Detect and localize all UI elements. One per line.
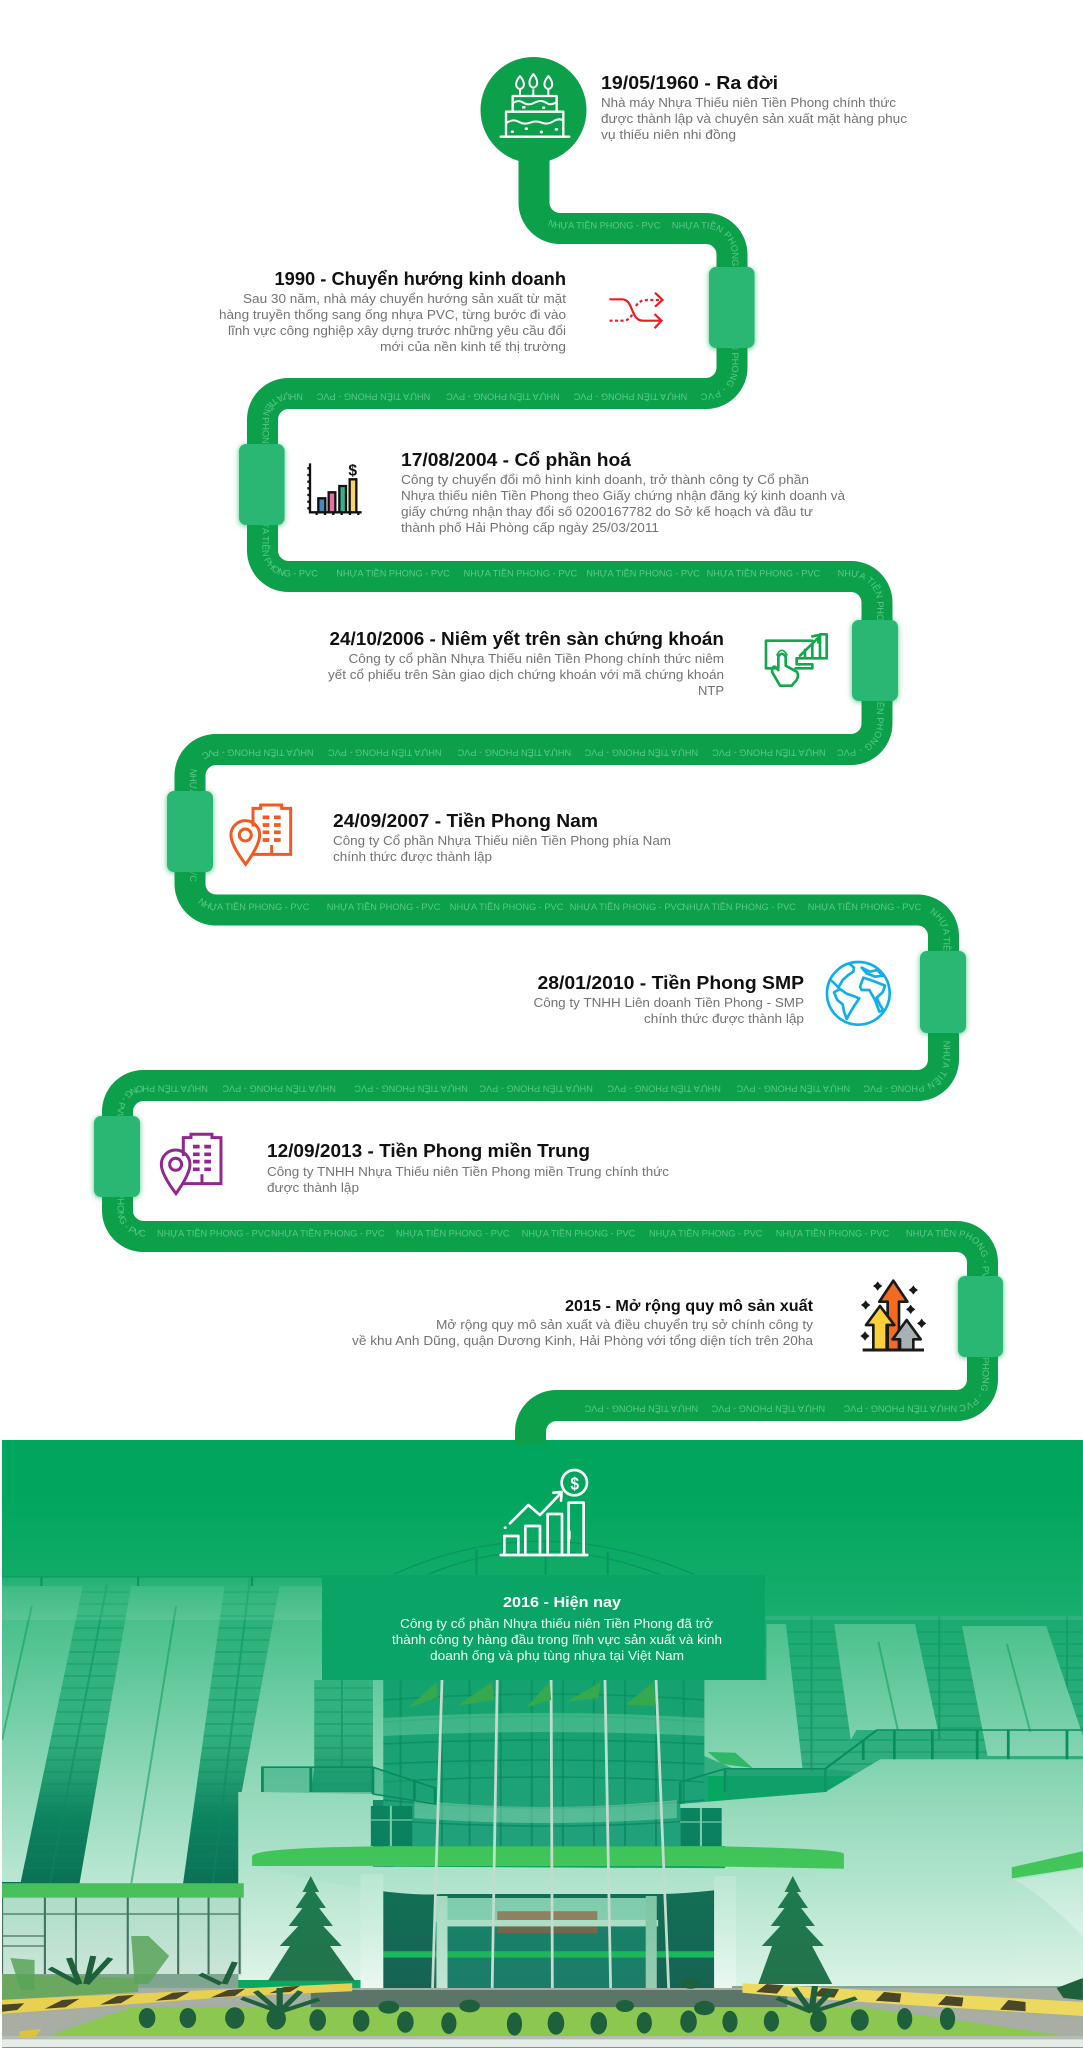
milestone 2004: 17/08/2004 - Cổ phần hoá <box>401 450 632 470</box>
back dome <box>383 1680 708 1848</box>
panel body: thành công ty hàng đầu trong lĩnh vực sản xuất và kinh <box>392 1632 722 1647</box>
milestone 2013: được thành lập <box>267 1180 359 1195</box>
right wing windows <box>704 1616 1083 1776</box>
pipe lettering: NHỰA TIỀN PHONG - PVC <box>328 902 440 912</box>
right terrace wall <box>680 1759 1083 1988</box>
milestone 1990: lĩnh vực công nghiệp xây dựng trước những yêu cầu đổi <box>228 323 566 338</box>
milestone 2013: 12/09/2013 - Tiền Phong miền Trung <box>267 1141 590 1161</box>
panel body: doanh ống và phụ tùng nhựa tại Việt Nam <box>430 1648 684 1663</box>
right side block <box>1012 1850 1083 2020</box>
pipe lettering: NHỰA TIỀN PHONG - PVC <box>396 1228 509 1238</box>
milestone 2006: 24/10/2006 - Niêm yết trên sàn chứng khoán <box>330 629 724 649</box>
timeline pipe <box>102 160 998 1445</box>
pipe lettering: NHỰA TIỀN PHONG - PVC <box>118 1197 146 1236</box>
pipe lettering: NHỰA TIỀN PHONG - PVC <box>262 525 318 576</box>
icon: birthday cake on green circle <box>480 57 586 163</box>
milestone 2006: NTP <box>698 683 724 698</box>
pipe lettering: NHỰA TIỀN PHONG - PVC <box>608 1084 720 1094</box>
pipe lettering: NHỰA TIỀN PHONG - PVC <box>672 220 738 266</box>
milestone 2015 <box>352 1298 814 1348</box>
icon: white growth chart with coin <box>501 1470 587 1555</box>
milestone 2010: Công ty TNHH Liên doanh Tiền Phong - SMP <box>534 995 804 1010</box>
milestone 2004: Nhựa thiếu niên Tiền Phong theo Giấy chứng nhận đăng ký kinh doanh và <box>401 488 846 503</box>
pipe lettering: NHỰA TIỀN PHONG - PVC <box>707 568 820 578</box>
milestone 1990: Sau 30 năm, nhà máy chuyển hướng sản xuất từ mặt <box>243 291 566 306</box>
pipe lettering: NHỰA TIỀN PHONG - PVC <box>838 702 886 756</box>
pipe lettering: NHỰA TIỀN PHONG - PVC <box>683 902 796 912</box>
pipe lettering: NHỰA TIỀN PHONG - PVC <box>930 908 952 951</box>
milestone 2015: 2015 - Mở rộng quy mô sản xuất <box>565 1298 814 1315</box>
pipe lettering: NHỰA TIỀN PHONG - PVC <box>584 1404 698 1414</box>
overlay <box>0 1436 1083 2048</box>
milestone 1990: mới của nền kinh tế thị trường <box>380 339 566 354</box>
pipe lettering: NHỰA TIỀN PHONG - PVC <box>864 1042 950 1092</box>
milestone 2015: Mở rộng quy mô sản xuất và điều chuyển trụ sở chính công ty <box>436 1317 814 1332</box>
milestone 1960: vụ thiếu niên nhi đồng <box>601 127 736 142</box>
milestone 2007: Công ty Cổ phần Nhựa Thiếu niên Tiền Phong phía Nam <box>333 833 671 848</box>
pipe lettering <box>118 220 989 1414</box>
pipe lettering: NHỰA TIỀN PHONG - PVC <box>587 568 700 578</box>
shrubs <box>139 1978 1083 2036</box>
pipe lettering: NHỰA TIỀN PHONG - PVC <box>222 1084 336 1094</box>
milestone 2006: yết cổ phiếu trên Sàn giao dịch chứng khoán với mã chứng khoán <box>328 667 724 682</box>
capsule connectors <box>94 267 1003 1357</box>
pipe lettering: NHỰA TIỀN PHONG - PVC <box>843 1404 957 1414</box>
milestone 1960: Nhà máy Nhựa Thiếu niên Tiền Phong chính thức <box>601 95 897 110</box>
icon: hand touching tablet chart <box>766 634 827 686</box>
pipe lettering: NHỰA TIỀN PHONG - PVC <box>262 392 302 443</box>
pipe lettering: NHỰA TIỀN PHONG - PVC <box>188 769 197 882</box>
pipe lettering: NHỰA TIỀN PHONG - PVC <box>317 392 430 402</box>
milestone 2006 <box>328 629 724 698</box>
pipe lettering: NHỰA TIỀN PHONG - PVC <box>776 1228 890 1238</box>
pipe lettering: NHỰA TIỀN PHONG - PVC <box>158 1228 270 1238</box>
pipe lettering: NHỰA TIỀN PHONG - PVC <box>272 1228 384 1238</box>
milestone 2010: chính thức được thành lập <box>644 1011 804 1026</box>
pipe lettering: NHỰA TIỀN PHONG - PVC <box>464 568 577 578</box>
milestone 2010: 28/01/2010 - Tiền Phong SMP <box>538 973 804 993</box>
panel: 2016 present <box>322 1575 765 1680</box>
pipe lettering: NHỰA TIỀN PHONG - PVC <box>548 220 660 230</box>
icon: bar chart with dollar <box>307 463 362 515</box>
pipe lettering: NHỰA TIỀN PHONG - PVC <box>737 1084 850 1094</box>
lower left wing <box>0 1896 242 1976</box>
pipe lettering: NHỰA TIỀN PHONG - PVC <box>712 748 825 758</box>
pipe lettering: NHỰA TIỀN PHONG - PVC <box>650 1228 762 1238</box>
panel body <box>392 1616 722 1663</box>
icon: rising arrows <box>860 1281 926 1350</box>
milestone 2013 <box>267 1141 670 1195</box>
milestone 1990 <box>219 269 566 354</box>
pipe lettering: NHỰA TIỀN PHONG - PVC <box>328 748 441 758</box>
pipe lettering: NHỰA TIỀN PHONG - PVC <box>701 348 738 400</box>
icon: purple location pin and building <box>161 1134 221 1194</box>
panel heading: 2016 - Hiện nay <box>503 1594 622 1611</box>
pipe lettering: NHỰA TIỀN PHONG - PVC <box>570 902 683 912</box>
pipe lettering: NHỰA TIỀN PHONG - PVC <box>480 1084 592 1094</box>
panel body: Công ty cổ phần Nhựa thiếu niên Tiền Phong đã trở <box>400 1616 713 1631</box>
canopy <box>252 1866 844 1894</box>
left balcony <box>238 1792 373 1980</box>
milestone 1960: được thành lập và chuyên sản xuất mặt hàng phục <box>601 111 908 126</box>
icon: blue globe <box>827 962 890 1025</box>
icon: white growth chart with coin: $ <box>570 1473 579 1493</box>
pipe lettering: NHỰA TIỀN PHONG - PVC <box>906 1228 991 1285</box>
milestone 2007: chính thức được thành lập <box>333 849 492 864</box>
pipe lettering: NHỰA TIỀN PHONG - PVC <box>354 1084 468 1094</box>
pipe lettering: NHỰA TIỀN PHONG - PVC <box>522 1228 635 1238</box>
pipe lettering: NHỰA TIỀN PHONG - PVC <box>450 902 563 912</box>
icon: red shuffle arrows <box>610 293 662 328</box>
entrance <box>383 1888 715 1988</box>
milestone 2004 <box>401 450 846 535</box>
milestone 2006: Công ty cổ phần Nhựa Thiếu niên Tiền Phong chính thức niêm <box>348 651 724 666</box>
milestone 2010 <box>534 973 804 1026</box>
milestone 2004: Công ty chuyển đổi mô hình kinh doanh, trở thành công ty Cổ phần <box>401 472 809 487</box>
pipe lettering: NHỰA TIỀN PHONG - PVC <box>446 392 559 402</box>
milestone 1960: 19/05/1960 - Ra đời <box>601 73 778 93</box>
milestone 2007: 24/09/2007 - Tiền Phong Nam <box>333 811 598 831</box>
pipe lettering: NHỰA TIỀN PHONG - PVC <box>711 1404 825 1414</box>
pine trees <box>268 1876 832 1984</box>
ground <box>0 1988 1083 2047</box>
milestone 1990: hàng truyền thống sang ống nhựa PVC, từng bước đi vào <box>219 307 566 322</box>
pipe lettering: NHỰA TIỀN PHONG - PVC <box>118 1084 208 1116</box>
milestone 1990: 1990 - Chuyển hướng kinh doanh <box>274 269 566 289</box>
pipe lettering: NHỰA TIỀN PHONG - PVC <box>202 748 313 759</box>
pipe lettering: NHỰA TIỀN PHONG - PVC <box>198 898 309 912</box>
icon: orange location pin and building <box>231 805 291 864</box>
pipe lettering: NHỰA TIỀN PHONG - PVC <box>574 392 686 402</box>
milestone 2007 <box>333 811 671 864</box>
icon: bar chart with dollar: $ <box>348 463 357 480</box>
milestone 2004: giấy chứng nhận thay đổi số 0200167782 do Sở kế hoạch và đầu tư <box>401 504 813 519</box>
flag poles <box>432 1680 670 2018</box>
dome lines <box>394 1540 694 1574</box>
milestone 1960 <box>601 73 908 142</box>
pipe lettering: NHỰA TIỀN PHONG - PVC <box>337 568 450 578</box>
pipe lettering: NHỰA TIỀN PHONG - PVC <box>838 570 884 620</box>
photo: factory building with green overlay <box>0 1436 1083 2048</box>
pipe lettering: NHỰA TIỀN PHONG - PVC <box>585 748 698 758</box>
pipe lettering: NHỰA TIỀN PHONG - PVC <box>958 1304 991 1414</box>
pipe lettering: NHỰA TIỀN PHONG - PVC <box>458 748 570 758</box>
milestone 2015: về khu Anh Dũng, quận Dương Kinh, Hải Phòng với tổng diện tích trên 20ha <box>352 1333 814 1348</box>
milestone 2013: Công ty TNHH Nhựa Thiếu niên Tiền Phong miền Trung chính thức <box>267 1164 670 1179</box>
milestone 2004: thành phố Hải Phòng cấp ngày 25/03/2011 <box>401 520 659 535</box>
pipe lettering: NHỰA TIỀN PHONG - PVC <box>808 902 921 912</box>
